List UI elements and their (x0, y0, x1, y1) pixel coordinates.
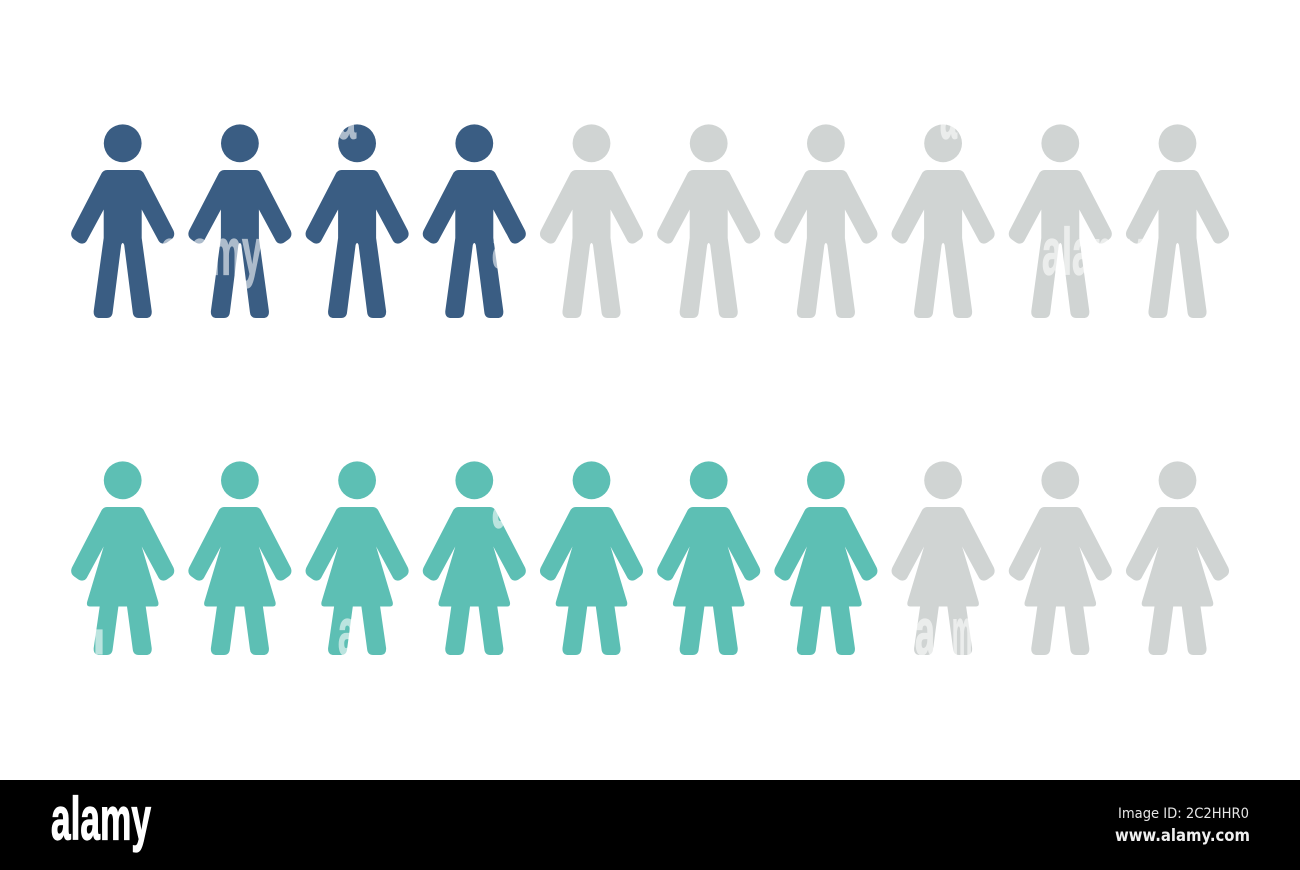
icon: woman 4 highlighted (423, 461, 526, 655)
logo: alamy: alamy (51, 786, 151, 852)
website: www.alamy.com (1115, 826, 1250, 845)
row of men: 4 of 10 highlighted (71, 124, 1229, 318)
icon: woman 7 highlighted (774, 461, 877, 655)
watermark fragments: m (952, 594, 972, 668)
icon: woman 2 highlighted (188, 461, 291, 655)
icon: woman 1 highlighted (71, 461, 174, 655)
watermark fragments: a (338, 594, 358, 668)
icon: woman 6 highlighted (657, 461, 760, 655)
icon: man 2 highlighted (188, 124, 291, 318)
watermark fragments: a (940, 78, 958, 152)
icon: man 10 grey (1126, 124, 1229, 318)
icon: man 8 grey (892, 124, 995, 318)
icon: woman 3 highlighted (306, 461, 409, 655)
watermark fragments: alamy (160, 214, 262, 288)
icon: man 6 grey (657, 124, 760, 318)
row of women: 7 of 10 highlighted (71, 461, 1229, 655)
icon: woman 8 grey (892, 461, 995, 655)
icon: woman 10 grey (1126, 461, 1229, 655)
watermark fragments: a (492, 468, 512, 542)
icon: man 5 grey (540, 124, 643, 318)
icon: man 7 grey (774, 124, 877, 318)
icon: woman 5 highlighted (540, 461, 643, 655)
watermark fragments (96, 78, 1144, 668)
watermark fragments: a (915, 594, 936, 668)
icon: man 1 highlighted (71, 124, 174, 318)
watermark fragments: a (337, 78, 357, 152)
icon: man 3 highlighted (306, 124, 409, 318)
image id: Image ID: 2C2HHR0 (1118, 806, 1249, 822)
icon: woman 9 grey (1009, 461, 1112, 655)
icon: man 9 grey (1009, 124, 1112, 318)
footer band (0, 780, 1300, 870)
icon: man 4 highlighted (423, 124, 526, 318)
watermark fragments: a (492, 208, 512, 282)
watermark fragments: alamy (1042, 214, 1144, 288)
